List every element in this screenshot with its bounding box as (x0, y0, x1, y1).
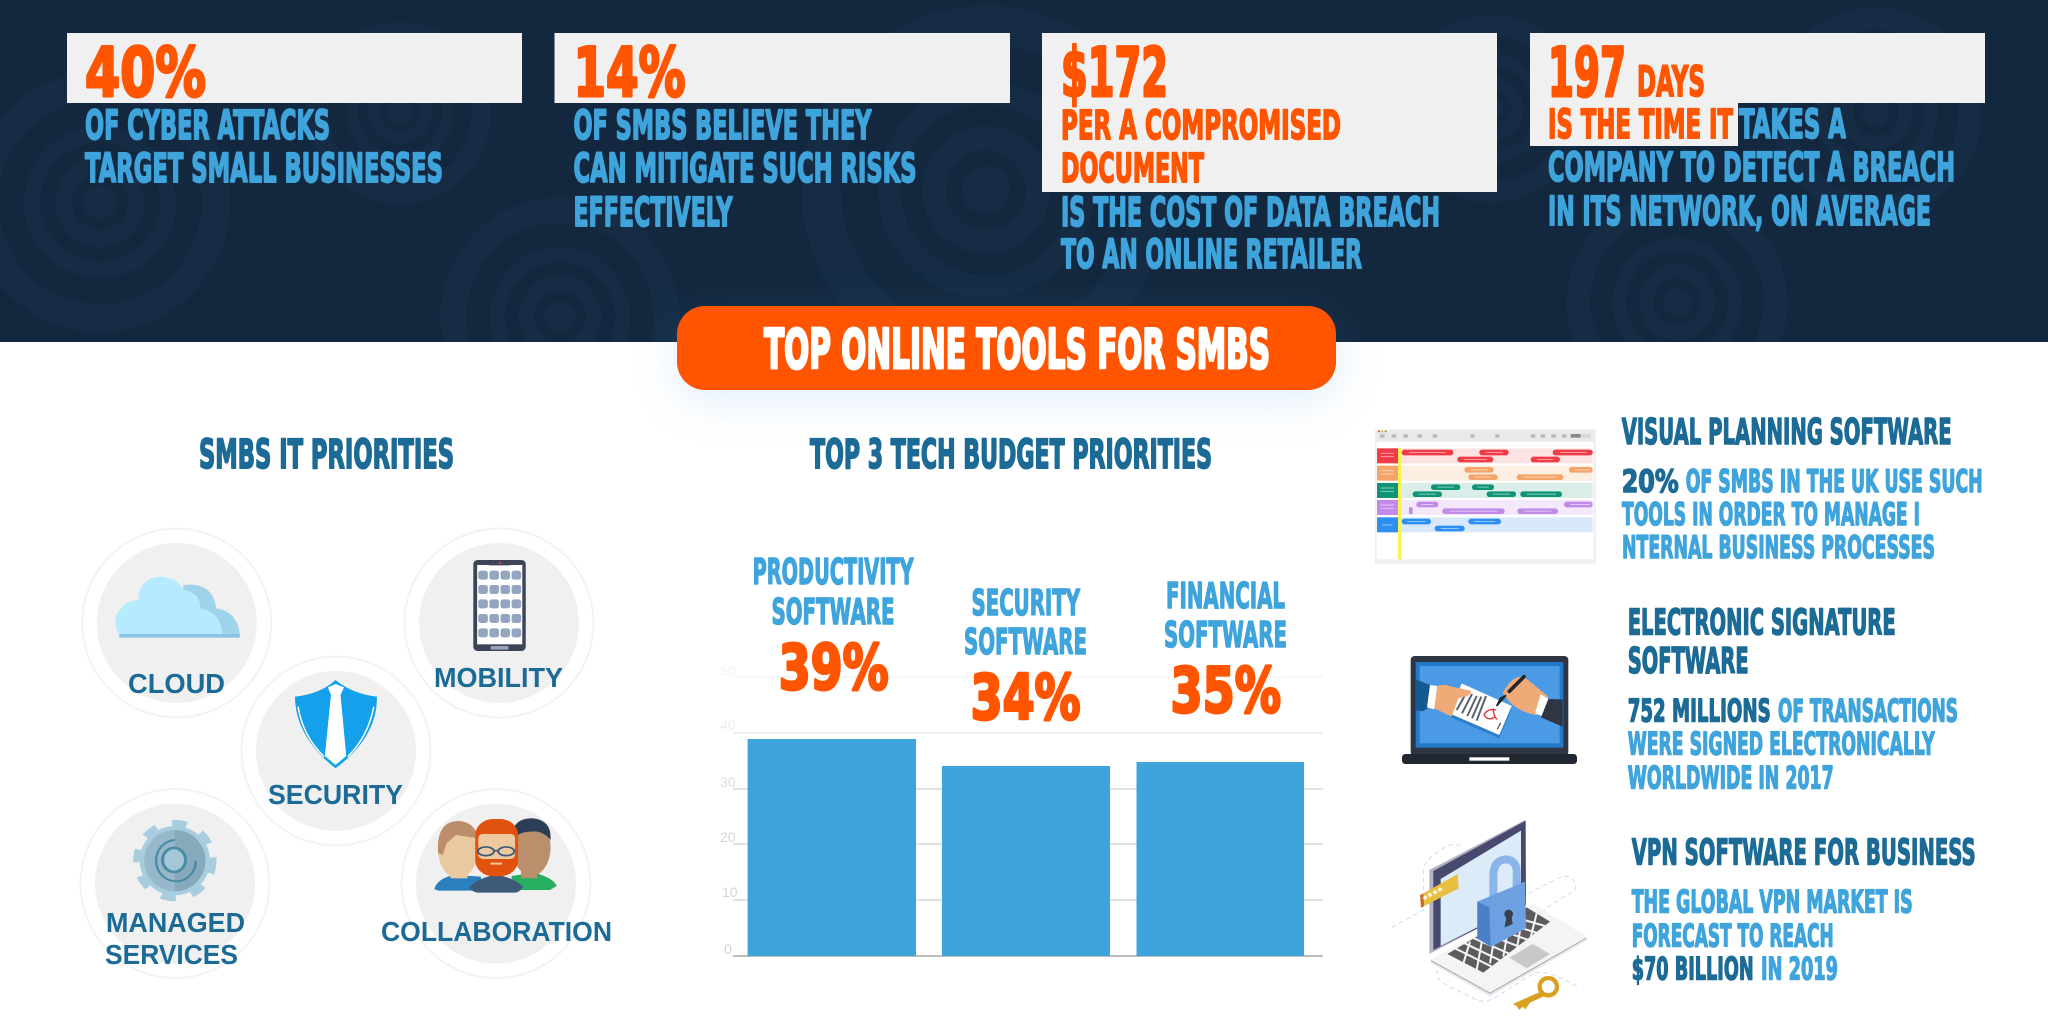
icon: laptop with padlock and key: **** (1421, 883, 1447, 907)
stat description: TARGET SMALL BUSINESSES (85, 144, 443, 192)
stat description: IS THE COST OF DATA BREACH (1061, 188, 1440, 236)
bar: security software (942, 766, 1110, 956)
description: 20% (1622, 464, 1679, 500)
item: cloud (82, 528, 271, 718)
bar label: financial (1164, 576, 1287, 727)
panel: stat 40% (67, 33, 522, 192)
item: managed services (80, 789, 270, 978)
stat highlight text (1061, 101, 1341, 192)
stat description: OF CYBER ATTACKS (85, 101, 330, 149)
label: MANAGED (106, 907, 245, 938)
icon: planning timeline screenshot (1375, 429, 1596, 564)
label: SERVICES (105, 939, 238, 970)
icon: smartphone (473, 560, 526, 651)
icon: laptop with padlock and key (1392, 820, 1587, 1010)
stat value 14%: 14% (574, 34, 686, 113)
stat description: TAKES A (1739, 100, 1846, 148)
icon: three people (434, 818, 557, 893)
bar label: security: SOFTWARE (964, 622, 1087, 663)
bar label: productivity: SOFTWARE (772, 592, 894, 633)
heading: SMBS IT PRIORITIES (199, 430, 454, 478)
panel: electronic signature software (1402, 603, 1958, 796)
title banner: TOP ONLINE TOOLS FOR SMBS (764, 318, 1270, 381)
bar: productivity software (748, 739, 916, 956)
bar label: security: SECURITY (972, 583, 1081, 624)
description: FORECAST TO REACH (1632, 918, 1834, 954)
icon: laptop with signing hands (1402, 656, 1577, 764)
bar label: security (964, 583, 1087, 734)
stat description (574, 101, 916, 236)
heading (1628, 603, 1896, 682)
panel: top 3 tech budget priorities (720, 430, 1323, 957)
panel: stat $172 (1042, 33, 1497, 278)
stat unit days: DAYS (1637, 57, 1705, 106)
stat description: EFFECTIVELY (574, 188, 733, 236)
item: mobility (404, 528, 594, 718)
item: security (242, 656, 430, 846)
label (105, 907, 245, 970)
stat value $172: $172 (1061, 34, 1168, 113)
stat highlight text: IS THE TIME IT (1548, 100, 1733, 148)
bar chart: 0 (724, 941, 732, 957)
bar label: financial: FINANCIAL (1166, 576, 1285, 617)
stat description (1548, 100, 1955, 235)
stat highlight text: DOCUMENT (1061, 144, 1204, 192)
panel: SMBs IT priorities (80, 430, 612, 978)
bar label: security: 34% (971, 661, 1081, 734)
stat value 197: 197 (1548, 34, 1626, 113)
description (1622, 464, 1983, 566)
bar chart: 30 (720, 774, 736, 790)
stat description (85, 101, 443, 192)
panel: visual planning software (1375, 412, 1983, 566)
label: SECURITY (268, 779, 403, 810)
panel: dark header band with target pattern (0, 0, 2048, 342)
bar chart: 20 (720, 829, 736, 845)
description (1632, 884, 1913, 988)
label: CLOUD (128, 668, 225, 699)
bar chart: 10 (722, 884, 738, 900)
bar label: productivity: PRODUCTIVITY (753, 552, 914, 593)
panel: stat 197 days (1530, 33, 1985, 235)
icon: shield with tie (295, 680, 377, 768)
stat description (1061, 188, 1440, 278)
description: $70 BILLION (1632, 952, 1754, 988)
icon: gear (138, 824, 212, 897)
description: WORLDWIDE IN 2017 (1628, 760, 1834, 796)
label: COLLABORATION (381, 916, 612, 947)
heading: SOFTWARE (1628, 641, 1749, 682)
bar label: productivity: 39% (779, 631, 889, 704)
stat description: CAN MITIGATE SUCH RISKS (574, 144, 916, 192)
panel: stat 14% (554, 33, 1010, 236)
item: collaboration (381, 789, 612, 978)
bar label: productivity (753, 552, 914, 704)
bar chart (720, 663, 1323, 957)
bar label: financial: SOFTWARE (1164, 615, 1287, 656)
stat value 40%: 40% (85, 34, 206, 113)
heading: TOP 3 TECH BUDGET PRIORITIES (810, 430, 1212, 478)
panel: VPN software for business (1392, 820, 1976, 1010)
stat description: TO AN ONLINE RETAILER (1061, 230, 1362, 278)
bar chart: 50 (720, 663, 736, 679)
label: MOBILITY (434, 662, 563, 693)
stat description: OF SMBS BELIEVE THEY (574, 101, 872, 149)
description (1628, 693, 1958, 796)
icon: cloud (116, 577, 240, 638)
title banner (677, 306, 1336, 390)
description: IN 2019 (1761, 952, 1838, 988)
bar chart: 40 (720, 717, 736, 733)
description: 752 MILLIONS (1628, 693, 1771, 729)
bar: financial software (1136, 762, 1304, 956)
bar label: financial: 35% (1170, 654, 1281, 727)
stat highlight text: PER A COMPROMISED (1061, 101, 1341, 149)
